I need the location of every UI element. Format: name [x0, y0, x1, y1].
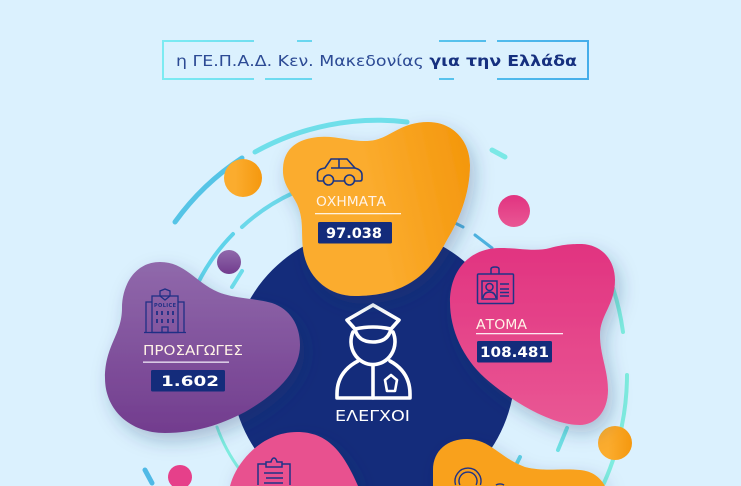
title text: η ΓΕ.Π.Α.Δ. Κεν. Μακεδονίας για την Ελλάδα: [176, 52, 577, 70]
icon: police station: [144, 289, 186, 332]
value box: [151, 370, 225, 392]
icon: id badge: [478, 267, 514, 304]
label: ΟΧΗΜΑΤΑ: [316, 195, 386, 210]
value box: [318, 222, 392, 244]
label: ΠΡΟΣΑΓΩΓΕΣ: [143, 344, 243, 359]
value box: [477, 341, 552, 362]
blob: [105, 262, 300, 433]
rule: [315, 213, 401, 214]
label: ΑΤΟΜΑ: [476, 318, 527, 333]
blob: [230, 432, 358, 486]
blob: [433, 439, 605, 486]
title box: [163, 41, 588, 79]
panel: persons: [450, 244, 615, 425]
icon: car: [318, 159, 362, 185]
blob: [283, 122, 470, 296]
icon: clipboard: [258, 458, 290, 485]
accent dot: orange right: [598, 426, 632, 460]
blob: [450, 244, 615, 425]
value: 108.481: [480, 345, 549, 361]
accent dot: orange: [224, 159, 262, 197]
label: checks: ΕΛΕΓΧΟΙ: [335, 407, 410, 425]
rule: [143, 362, 229, 363]
rule: [476, 333, 563, 334]
panel: bottom orange: [433, 439, 605, 486]
central navy circle: [231, 228, 515, 486]
icon: rings: [455, 468, 504, 485]
icon: police officer: [337, 305, 410, 398]
value: 1.602: [161, 374, 219, 390]
accent dot: purple: [217, 250, 241, 274]
panel: bottom pink: [230, 432, 358, 486]
accent dot: pink bottom: [168, 465, 192, 486]
value: 97.038: [326, 226, 382, 242]
icon: police station: POLICE: [154, 303, 177, 309]
accent dot: pink: [498, 195, 530, 227]
orbit arcs: [145, 120, 627, 483]
panel: vehicles: [283, 122, 470, 296]
panel: detentions: [105, 262, 300, 433]
